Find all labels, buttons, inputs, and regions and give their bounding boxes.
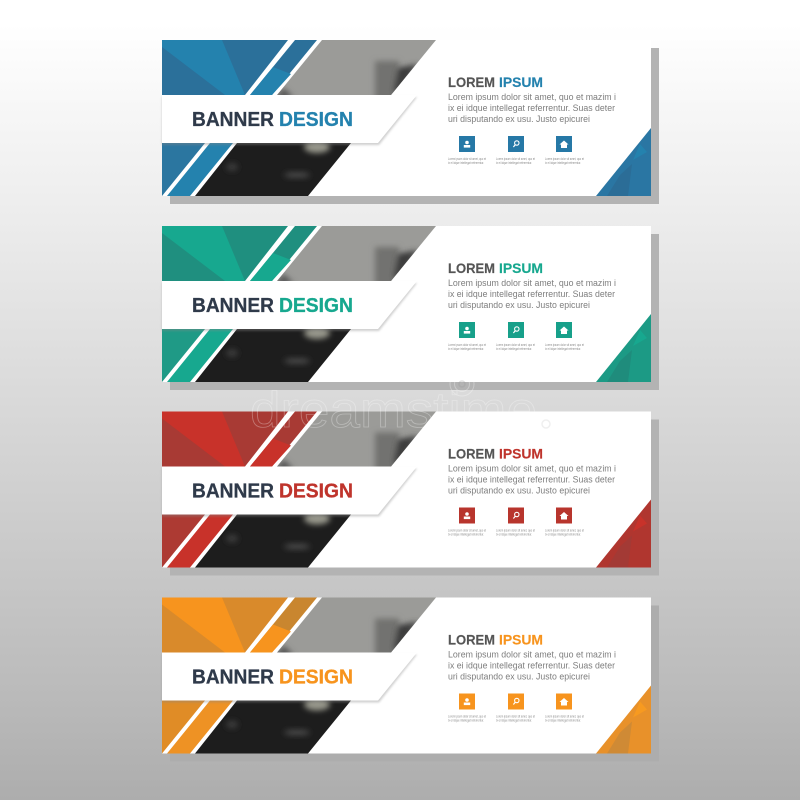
title: [192, 294, 353, 317]
title: [192, 666, 353, 688]
caption 2: ix ei idque intellegat referrentur.: [496, 161, 532, 165]
drop shadow: [170, 48, 659, 204]
caption 2: [496, 714, 535, 722]
bottom left stripe: [162, 514, 205, 568]
caption 3: [545, 157, 584, 165]
caption 1: ix ei idque intellegat referrentur.: [448, 718, 484, 722]
heading: LOREM: [448, 260, 495, 276]
top left stripe: [162, 40, 288, 95]
bottom second stripe: [167, 143, 233, 196]
title: BANNER: [192, 480, 274, 502]
drop shadow: [170, 606, 659, 762]
caption 3: Lorem ipsum dolor sit amet, quo et: [545, 157, 584, 161]
top second stripe: [250, 226, 317, 281]
top second stripe: [250, 412, 317, 466]
photo: dark: [195, 700, 351, 754]
caption 2: Lorem ipsum dolor sit amet, quo et: [496, 528, 535, 532]
icon: search: [508, 694, 524, 710]
photo: grey: [277, 226, 436, 281]
banner: blue: [162, 35, 659, 204]
caption 3: [545, 528, 584, 536]
heading: [448, 74, 543, 90]
icon: search: [508, 136, 524, 152]
caption 1: Lorem ipsum dolor sit amet, quo et: [448, 157, 486, 161]
corner triangle: [596, 314, 651, 382]
icon: search: [508, 508, 524, 524]
bottom left stripe: [162, 700, 205, 754]
photo: dark: [195, 329, 351, 382]
top second stripe: [250, 598, 317, 652]
heading: IPSUM: [499, 74, 543, 90]
caption 2: ix ei idque intellegat referrentur.: [496, 532, 532, 536]
corner triangle: [596, 686, 651, 754]
icon: person: [459, 136, 475, 152]
caption 3: Lorem ipsum dolor sit amet, quo et: [545, 714, 584, 718]
icon: home: [556, 136, 572, 152]
watermark: dreamstime: [250, 382, 537, 438]
body text: Lorem ipsum dolor sit amet, quo et mazim i: [448, 650, 616, 660]
caption 2: Lorem ipsum dolor sit amet, quo et: [496, 343, 535, 347]
card: [162, 412, 651, 568]
caption 1: Lorem ipsum dolor sit amet, quo et: [448, 714, 486, 718]
caption 1: [448, 714, 486, 722]
body text: [448, 464, 616, 496]
card: [162, 226, 651, 382]
title: BANNER: [192, 666, 274, 688]
icon: person: [459, 508, 475, 524]
caption 3: ix ei idque intellegat referrentur.: [545, 532, 581, 536]
heading: [448, 632, 543, 648]
banner: green: [162, 221, 659, 390]
caption 3: Lorem ipsum dolor sit amet, quo et: [545, 528, 584, 532]
photo: grey: [277, 40, 436, 95]
body text: ix ei idque intellegat referrentur. Suas deter: [448, 289, 616, 300]
body text: uri disputando ex usu. Justo epicurei: [448, 114, 590, 125]
icon: person: [459, 322, 475, 338]
body text: [448, 650, 616, 682]
white title strip: [162, 281, 417, 331]
bottom left stripe: [162, 329, 205, 382]
corner triangle: [596, 128, 651, 196]
heading: [448, 260, 543, 276]
heading: LOREM: [448, 446, 495, 462]
title: [192, 108, 353, 131]
title: DESIGN: [279, 666, 353, 688]
icon: home: [556, 322, 572, 338]
title: DESIGN: [279, 108, 353, 131]
white title strip: [162, 652, 417, 702]
photo: dark: [195, 514, 351, 568]
title: BANNER: [192, 108, 274, 131]
caption 1: Lorem ipsum dolor sit amet, quo et: [448, 343, 486, 347]
heading: IPSUM: [499, 632, 543, 648]
body text: [448, 278, 616, 311]
caption 2: Lorem ipsum dolor sit amet, quo et: [496, 157, 535, 161]
title: [192, 480, 353, 502]
bottom left stripe: [162, 143, 205, 196]
card: [162, 598, 651, 754]
caption 3: [545, 343, 584, 351]
caption 2: [496, 528, 535, 536]
title: DESIGN: [279, 294, 353, 317]
caption 1: ix ei idque intellegat referrentur.: [448, 347, 484, 351]
white title strip: [162, 95, 417, 145]
caption 1: Lorem ipsum dolor sit amet, quo et: [448, 528, 486, 532]
top second stripe: [250, 40, 317, 95]
heading: IPSUM: [499, 446, 543, 462]
caption 2: ix ei idque intellegat referrentur.: [496, 347, 532, 351]
body text: Lorem ipsum dolor sit amet, quo et mazim i: [448, 92, 616, 103]
body text: ix ei idque intellegat referrentur. Suas deter: [448, 660, 616, 672]
photo: grey: [277, 412, 436, 466]
bottom second stripe: [167, 514, 233, 568]
caption 3: ix ei idque intellegat referrentur.: [545, 161, 581, 165]
banner: orange: [162, 592, 659, 762]
photo: dark: [195, 143, 351, 196]
card: [162, 40, 651, 196]
body text: Lorem ipsum dolor sit amet, quo et mazim i: [448, 278, 616, 289]
body text: uri disputando ex usu. Justo epicurei: [448, 300, 590, 311]
drop shadow: [170, 234, 659, 390]
top left stripe: [162, 226, 288, 281]
body text: ix ei idque intellegat referrentur. Suas deter: [448, 474, 616, 486]
title: DESIGN: [279, 480, 353, 502]
caption 3: ix ei idque intellegat referrentur.: [545, 347, 581, 351]
heading: [448, 446, 543, 462]
body text: uri disputando ex usu. Justo epicurei: [448, 672, 590, 682]
caption 1: [448, 157, 486, 165]
drop shadow: [170, 420, 659, 576]
caption 2: ix ei idque intellegat referrentur.: [496, 718, 532, 722]
heading: LOREM: [448, 632, 495, 648]
icon: home: [556, 694, 572, 710]
icon: home: [556, 508, 572, 524]
icon: search: [508, 322, 524, 338]
caption 2: Lorem ipsum dolor sit amet, quo et: [496, 714, 535, 718]
caption 3: ix ei idque intellegat referrentur.: [545, 718, 581, 722]
body text: ix ei idque intellegat referrentur. Suas deter: [448, 103, 616, 114]
caption 1: [448, 528, 486, 536]
caption 1: ix ei idque intellegat referrentur.: [448, 161, 484, 165]
heading: IPSUM: [499, 260, 543, 276]
bottom second stripe: [167, 700, 233, 754]
caption 3: Lorem ipsum dolor sit amet, quo et: [545, 343, 584, 347]
title: BANNER: [192, 294, 274, 317]
body text: uri disputando ex usu. Justo epicurei: [448, 486, 590, 496]
body text: [448, 92, 616, 125]
caption 1: [448, 343, 486, 351]
banner: red: [162, 406, 659, 576]
icon: person: [459, 694, 475, 710]
photo: grey: [277, 598, 436, 652]
top left stripe: [162, 598, 288, 652]
caption 2: [496, 343, 535, 351]
caption 3: [545, 714, 584, 722]
heading: LOREM: [448, 74, 495, 90]
top left stripe: [162, 412, 288, 466]
caption 1: ix ei idque intellegat referrentur.: [448, 532, 484, 536]
corner triangle: [596, 500, 651, 568]
white title strip: [162, 466, 417, 516]
body text: Lorem ipsum dolor sit amet, quo et mazim i: [448, 464, 616, 474]
bottom second stripe: [167, 329, 233, 382]
caption 2: [496, 157, 535, 165]
